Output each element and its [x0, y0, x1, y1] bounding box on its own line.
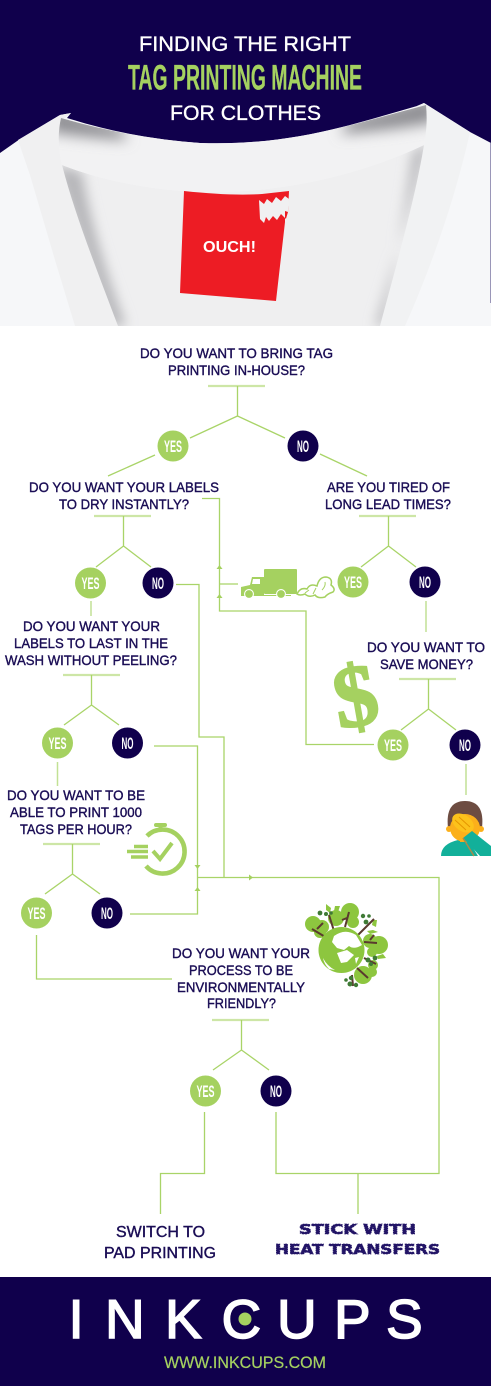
inkcups logo: U [277, 1288, 317, 1350]
question: last in the wash: DO YOU WANT YOUR [23, 619, 160, 634]
inkcups logo: I [68, 1288, 84, 1350]
yes and no nodes: NO [297, 438, 309, 456]
outcome: switch to pad printing: PAD PRINTING [104, 1245, 216, 1262]
question: 1000 tags per hour: DO YOU WANT TO BE [7, 788, 145, 803]
yes and no nodes: YES [384, 737, 402, 755]
question: save money [367, 640, 485, 672]
inkcups logo: S [386, 1288, 423, 1350]
icon: facepalm emoji [441, 801, 491, 856]
question: environmentally friendly: ENVIRONMENTALLY [177, 980, 305, 995]
icon: green earth with trees [305, 903, 388, 987]
icon: truck with exhaust [241, 569, 334, 599]
t-shirt collar illustration [0, 96, 491, 330]
question: dry instantly: TO DRY INSTANTLY? [59, 497, 189, 512]
outcome: switch to pad printing [104, 1224, 216, 1262]
yes and no nodes: NO [459, 737, 471, 755]
question: long lead times [325, 480, 451, 512]
inner neck [62, 145, 424, 326]
yes and no nodes: YES [196, 1083, 214, 1101]
left collar [18, 113, 118, 326]
question: 1000 tags per hour: ABLE TO PRINT 1000 [10, 805, 142, 820]
question: last in the wash: WASH WITHOUT PEELING? [5, 653, 177, 668]
icon: dollar sign: $ [326, 646, 386, 749]
yes and no nodes: NO [101, 905, 113, 923]
yes and no nodes: YES [82, 575, 100, 593]
question: bring tag printing in-house: PRINTING IN-HOUSE? [168, 363, 305, 378]
question: 1000 tags per hour: TAGS PER HOUR? [20, 822, 132, 837]
question: environmentally friendly [172, 946, 310, 1011]
arrowheads [194, 565, 253, 891]
yes and no nodes: NO [152, 575, 164, 593]
title: FINDING THE RIGHT [139, 32, 351, 56]
outcome: stick with heat transfers: STICK WITH [299, 1223, 416, 1238]
question: environmentally friendly: FRIENDLY? [207, 996, 276, 1011]
red tag: OUCH! [203, 239, 256, 256]
yes and no nodes: NO [122, 735, 134, 753]
question: dry instantly [29, 480, 219, 512]
question: last in the wash: LABELS TO LAST IN THE [14, 636, 168, 651]
question: save money: SAVE MONEY? [380, 657, 473, 672]
flowchart connectors [36, 386, 466, 1214]
outcome: stick with heat transfers: HEAT TRANSFERS [275, 1243, 440, 1258]
yes and no nodes: YES [344, 574, 362, 592]
yes and no nodes: NO [270, 1083, 282, 1101]
title: FOR CLOTHES [170, 101, 321, 125]
icon: stopwatch [127, 823, 185, 874]
red tag [180, 191, 289, 301]
yes and no nodes: NO [419, 574, 431, 592]
question: last in the wash [5, 619, 177, 668]
question: save money: DO YOU WANT TO [367, 640, 485, 655]
question: long lead times: LONG LEAD TIMES? [325, 497, 451, 512]
footer panel [0, 1277, 491, 1386]
yes and no nodes: YES [28, 905, 46, 923]
question: 1000 tags per hour [7, 788, 145, 837]
inkcups logo: P [334, 1288, 371, 1350]
yes and no nodes [21, 430, 480, 1106]
yes and no nodes: YES [48, 735, 66, 753]
question: bring tag printing in-house [140, 346, 333, 378]
title [128, 32, 362, 125]
neck band [58, 105, 427, 152]
question: environmentally friendly: PROCESS TO BE [189, 963, 293, 978]
yes and no nodes: YES [164, 438, 182, 456]
outcome: stick with heat transfers [275, 1223, 440, 1258]
inkcups logo: K [165, 1288, 202, 1350]
website url: WWW.INKCUPS.COM [164, 1354, 326, 1372]
inkcups logo: N [105, 1288, 145, 1350]
outcome: switch to pad printing: SWITCH TO [116, 1224, 205, 1241]
inkcups logo [68, 1288, 423, 1350]
question: long lead times: ARE YOU TIRED OF [327, 480, 450, 495]
question: bring tag printing in-house: DO YOU WANT TO BRING TAG [140, 346, 333, 361]
header panel [0, 0, 491, 160]
right collar [380, 103, 470, 326]
question: environmentally friendly: DO YOU WANT YOUR [172, 946, 310, 961]
question: dry instantly: DO YOU WANT YOUR LABELS [29, 480, 219, 495]
inkcups logo: C [222, 1288, 261, 1350]
